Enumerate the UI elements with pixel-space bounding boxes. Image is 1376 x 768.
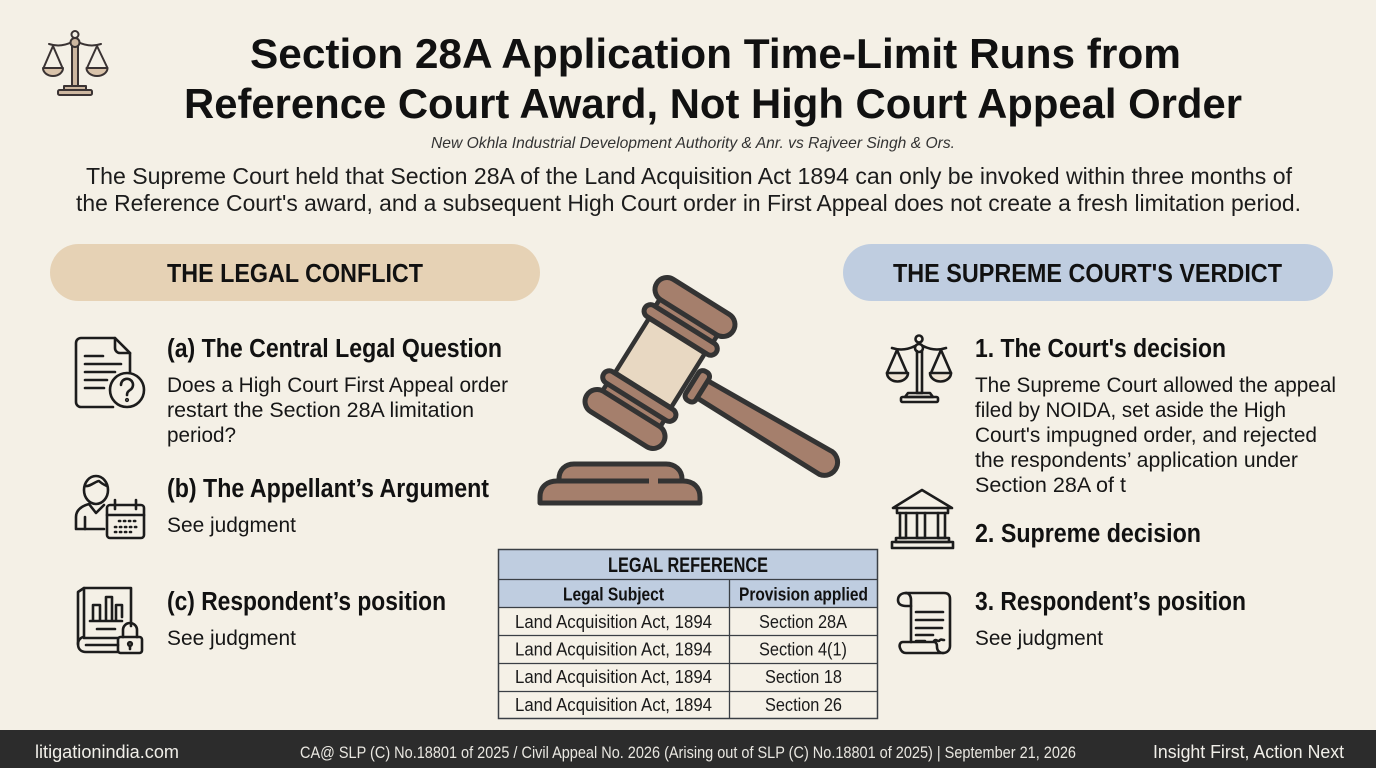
item (c): respondent's position: (c) Respondent’s position xyxy=(167,588,446,616)
icon: document with question mark xyxy=(76,338,144,407)
icon: scroll xyxy=(898,593,950,653)
table row: Section 26: Land Acquisition Act, 1894 xyxy=(515,694,712,715)
item 3: respondent's position: See judgment xyxy=(975,626,1103,650)
table header row: Provision applied xyxy=(739,584,868,604)
item 1: the court's decision: The Supreme Court allowed the appeal xyxy=(975,373,1336,397)
table row: Section 28A xyxy=(515,611,848,632)
footer bar xyxy=(0,730,1376,768)
item (b): appellant's argument: See judgment xyxy=(167,513,296,537)
icon: court building xyxy=(892,490,953,548)
item (a): central legal question: restart the Section 28A limitation xyxy=(167,398,474,422)
gavel head and handle xyxy=(581,273,875,538)
icon: scales of justice xyxy=(887,336,951,402)
item (c): respondent's position: See judgment xyxy=(167,626,296,650)
table header row xyxy=(563,584,868,604)
item (a): central legal question: period? xyxy=(167,423,236,447)
summary text: the Reference Court's award, and a subsequent High Court order in First Appeal does not create a fresh limitation period. xyxy=(76,190,1301,216)
footer: tagline: Insight First, Action Next xyxy=(1153,741,1344,762)
table row: Section 28A: Section 28A xyxy=(759,611,848,632)
item 3: respondent's position xyxy=(975,588,1246,650)
summary text: The Supreme Court held that Section 28A of the Land Acquisition Act 1894 can only be invoked within three months of xyxy=(86,163,1292,189)
table row: Section 26 xyxy=(515,694,842,715)
icon: book with chart and lock xyxy=(78,588,142,653)
panel: the supreme court's verdict xyxy=(843,244,1336,653)
table: legal reference xyxy=(498,550,878,718)
table row: Section 28A: Land Acquisition Act, 1894 xyxy=(515,611,712,632)
icon: central gavel xyxy=(540,273,875,538)
item (a): central legal question xyxy=(167,335,508,447)
table row: Section 26: Section 26 xyxy=(765,694,842,715)
item 1: the court's decision: Section 28A of t xyxy=(975,473,1126,497)
heading pill: the supreme court's verdict xyxy=(843,244,1333,301)
title: Reference Court Award, Not High Court Appeal Order xyxy=(184,80,1242,127)
item 2: supreme decision: 2. Supreme decision xyxy=(975,520,1201,548)
icon: person with calendar xyxy=(76,476,144,538)
footer: citation: CA@ SLP (C) No.18801 of 2025 / Civil Appeal No. 2026 (Arising out of SLP (C) No.18801 of 2025) | September 21, 2026 xyxy=(300,744,1076,762)
table row: Section 4(1): Section 4(1) xyxy=(759,638,847,660)
item (c): respondent's position xyxy=(167,588,446,650)
item (a): central legal question: (a) The Central Legal Question xyxy=(167,335,502,363)
item 1: the court's decision: Court's impugned order, and rejected xyxy=(975,423,1317,447)
table title: LEGAL REFERENCE xyxy=(608,554,768,577)
summary text xyxy=(76,163,1301,216)
item (a): central legal question: Does a High Court First Appeal order xyxy=(167,373,508,397)
item (b): appellant's argument: (b) The Appellant’s Argument xyxy=(167,475,489,503)
gavel sounding block xyxy=(540,464,700,503)
heading pill: the legal conflict xyxy=(50,244,540,301)
table row: Section 4(1) xyxy=(515,638,847,660)
item 1: the court's decision: 1. The Court's decision xyxy=(975,335,1226,363)
footer: website: litigationindia.com xyxy=(35,741,179,762)
heading pill: the legal conflict: THE LEGAL CONFLICT xyxy=(167,260,423,288)
case name subtitle: New Okhla Industrial Development Authority & Anr. vs Rajveer Singh & Ors. xyxy=(431,135,955,152)
item 1: the court's decision xyxy=(975,335,1336,497)
icon: header scales of justice xyxy=(43,31,108,95)
heading pill: the supreme court's verdict: THE SUPREME COURT'S VERDICT xyxy=(893,260,1282,288)
title: Section 28A Application Time-Limit Runs from xyxy=(250,30,1181,77)
item 3: respondent's position: 3. Respondent’s position xyxy=(975,588,1246,616)
title xyxy=(184,30,1242,127)
item 1: the court's decision: filed by NOIDA, set aside the High xyxy=(975,398,1286,422)
table row: Section 4(1): Land Acquisition Act, 1894 xyxy=(515,638,712,660)
table row: Section 18: Section 18 xyxy=(765,666,842,687)
table row: Section 18: Land Acquisition Act, 1894 xyxy=(515,666,712,687)
table row: Section 18 xyxy=(515,666,842,687)
table header row: Legal Subject xyxy=(563,584,664,604)
item (b): appellant's argument xyxy=(167,475,489,537)
item 1: the court's decision: the respondents’ application under xyxy=(975,448,1298,472)
panel: the legal conflict xyxy=(50,244,540,653)
